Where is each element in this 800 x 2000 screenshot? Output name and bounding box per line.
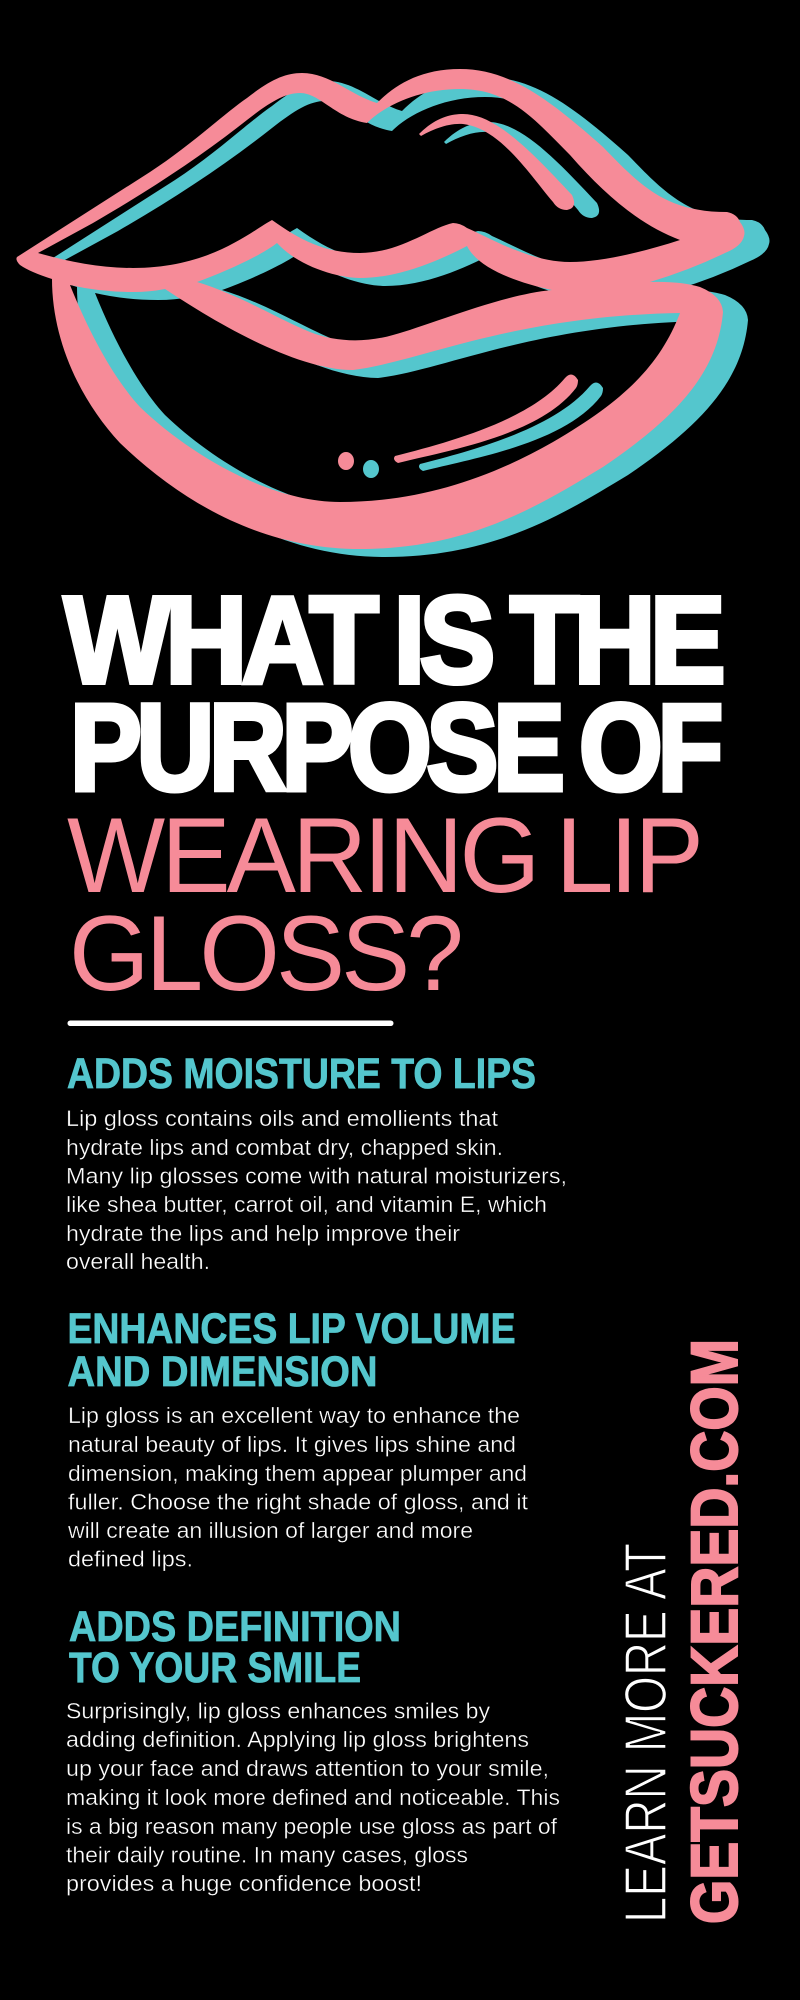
paragraph: fuller. Choose the right shade of gloss, and it	[68, 1490, 528, 1514]
paragraph	[67, 1403, 528, 1572]
section: enhances lip volume and dimension	[67, 1305, 528, 1572]
paragraph: Lip gloss contains oils and emollients that	[66, 1106, 498, 1131]
paragraph: Surprisingly, lip gloss enhances smiles by	[66, 1698, 490, 1724]
title line: purpose of: PURPOSE OF	[70, 680, 720, 817]
heading: AND DIMENSION	[68, 1348, 378, 1396]
paragraph: adding definition. Applying lip gloss brightens	[66, 1727, 529, 1752]
title	[64, 572, 722, 1013]
heading: TO YOUR SMILE	[69, 1644, 361, 1692]
paragraph: up your face and draws attention to your smile,	[66, 1756, 549, 1781]
paragraph: Lip gloss is an excellent way to enhance the	[68, 1403, 520, 1428]
paragraph: hydrate the lips and help improve their	[66, 1221, 460, 1246]
website url: GETSUCKERED.COM	[677, 1339, 751, 1924]
title line: wearing lip: WEARING LIP	[67, 795, 700, 915]
teal offset lips layer	[41, 77, 769, 557]
paragraph: will create an illusion of larger and more	[67, 1518, 473, 1543]
paragraph	[66, 1698, 560, 1896]
paragraph: hydrate lips and combat dry, chapped skin.	[66, 1135, 503, 1160]
heading	[68, 1305, 516, 1396]
section: adds definition to your smile	[66, 1603, 560, 1896]
paragraph: provides a huge confidence boost!	[66, 1871, 422, 1896]
paragraph: making it look more defined and noticeable. This	[66, 1785, 560, 1810]
paragraph: their daily routine. In many cases, gloss	[66, 1842, 468, 1868]
title underline	[68, 1020, 394, 1026]
paragraph: is a big reason many people use gloss as part of	[66, 1814, 558, 1839]
paragraph: natural beauty of lips. It gives lips shine and	[68, 1432, 516, 1457]
title line: what is the: WHAT IS THE	[64, 572, 722, 710]
learn more at: LEARN MORE AT	[613, 1543, 679, 1923]
paragraph	[66, 1106, 567, 1274]
paragraph: defined lips.	[68, 1546, 193, 1572]
heading	[69, 1603, 401, 1692]
heading: ENHANCES LIP VOLUME	[68, 1305, 516, 1353]
vertical call to action	[613, 1339, 751, 1924]
paragraph: dimension, making them appear plumper and	[68, 1461, 527, 1486]
paragraph: Many lip glosses come with natural moisturizers,	[66, 1164, 567, 1188]
section: adds moisture to lips	[66, 1050, 567, 1274]
heading: ADDS DEFINITION	[69, 1603, 401, 1651]
pink lips layer	[16, 69, 744, 549]
heading: ADDS MOISTURE TO LIPS	[67, 1050, 536, 1098]
icon: glossy lips illustration	[16, 69, 769, 557]
paragraph: overall health.	[66, 1249, 210, 1274]
title line: gloss: GLOSS?	[69, 893, 460, 1013]
paragraph: like shea butter, carrot oil, and vitamin E, which	[66, 1192, 547, 1217]
